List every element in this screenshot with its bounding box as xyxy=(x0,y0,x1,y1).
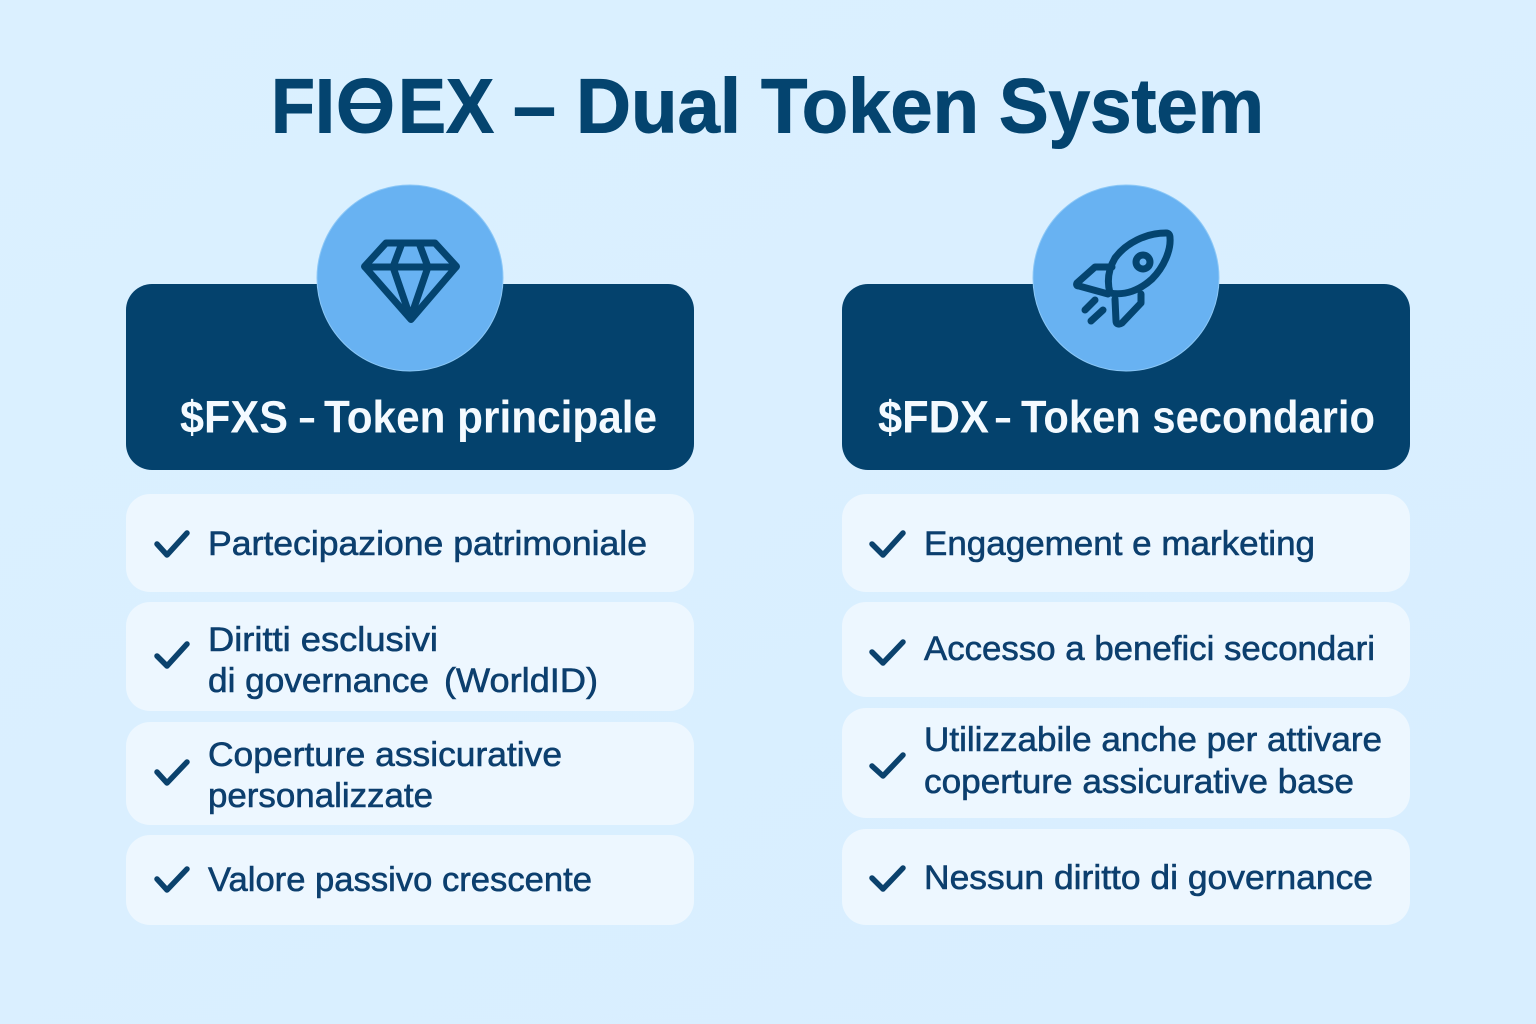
item: partecipazione patrimoniale: Partecipazione patrimoniale xyxy=(208,525,647,563)
item: diritti esclusivi xyxy=(126,602,694,711)
item: coperture assicurative: personalizzate xyxy=(208,777,433,815)
item: engagement xyxy=(842,494,1410,592)
heading: $FXS: – xyxy=(299,392,315,442)
panel: $FDX token secondario xyxy=(842,185,1410,925)
title xyxy=(271,64,1264,150)
title: Token xyxy=(761,64,979,150)
item: diritti esclusivi: (WorldID) xyxy=(444,662,598,700)
item: engagement: Engagement e marketing xyxy=(924,525,1315,563)
item: utilizzabile: coperture assicurative base xyxy=(924,763,1354,801)
title: Dual xyxy=(576,64,741,150)
heading: $FXS xyxy=(180,392,657,442)
item: valore passivo xyxy=(126,835,694,925)
item: utilizzabile xyxy=(842,708,1410,818)
heading: $FDX xyxy=(878,392,1375,442)
title: FI xyxy=(271,64,335,150)
item: coperture assicurative: Coperture assicurative xyxy=(208,736,562,774)
heading: $FXS: Token principale xyxy=(324,392,657,442)
item: nessun diritto xyxy=(842,829,1410,925)
heading: $FXS: $FXS xyxy=(180,392,288,442)
item: accesso xyxy=(842,602,1410,697)
heading: $FDX: Token secondario xyxy=(1021,392,1375,442)
item: accesso: Accesso a benefici secondari xyxy=(924,630,1375,668)
item: diritti esclusivi: Diritti esclusivi xyxy=(208,621,438,659)
title: – xyxy=(513,64,556,150)
panel: $FXS token principale xyxy=(126,185,694,925)
item: coperture assicurative xyxy=(126,722,694,825)
header: $FXS xyxy=(126,284,694,470)
icon: rocket xyxy=(1033,185,1219,371)
title: System xyxy=(999,64,1264,150)
item: valore passivo: Valore passivo crescente xyxy=(208,861,592,899)
icon: diamond xyxy=(317,185,503,371)
heading: $FDX: – xyxy=(995,392,1011,442)
header: $FDX xyxy=(842,284,1410,470)
title: Θ xyxy=(336,64,395,150)
item: utilizzabile: Utilizzabile anche per attivare xyxy=(924,721,1382,759)
item: nessun diritto: Nessun diritto di governance xyxy=(924,859,1373,897)
heading: $FDX: $FDX xyxy=(878,392,989,442)
title: EX xyxy=(398,64,494,150)
item: diritti esclusivi: di governance xyxy=(208,662,429,700)
item: partecipazione patrimoniale xyxy=(126,494,694,592)
